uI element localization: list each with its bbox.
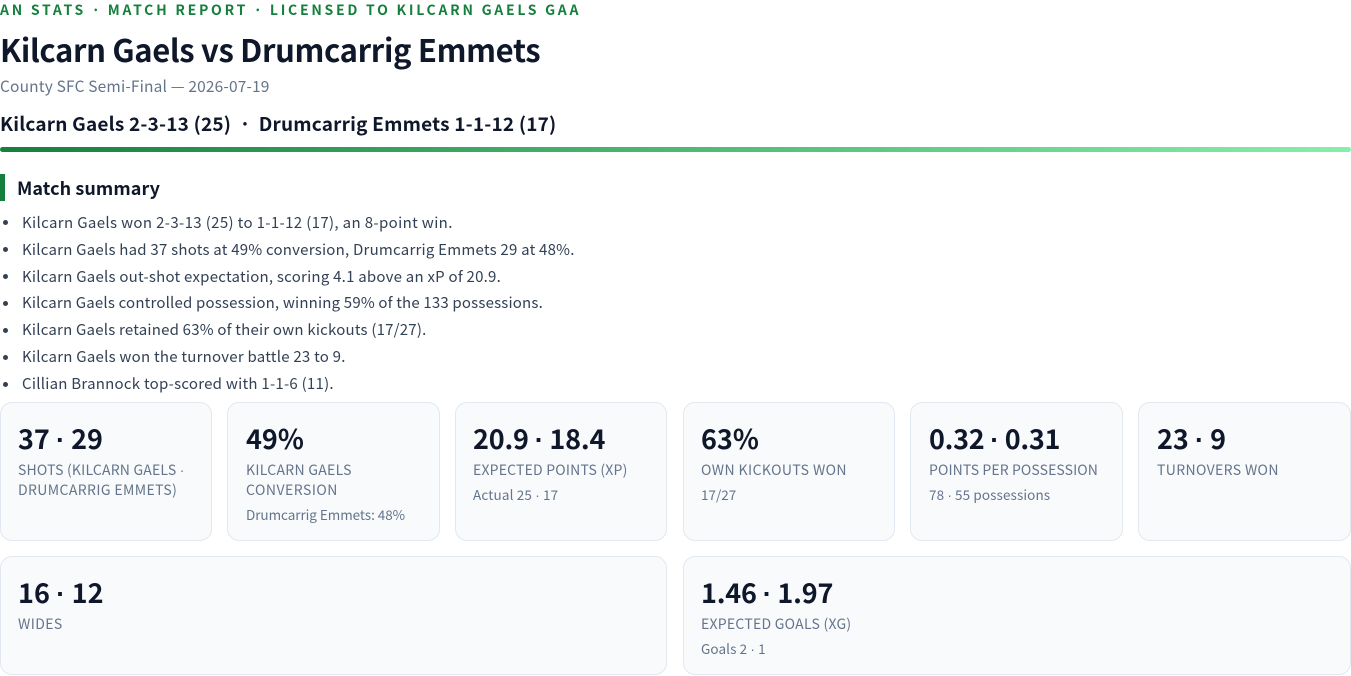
card: own kickouts [683, 402, 895, 541]
summary bullet list: Kilcarn Gaels won the turnover battle 23 to 9. [22, 346, 346, 367]
subtitle: County SFC Semi-Final — 2026-07-19 [0, 75, 270, 97]
card: points per possession: POINTS PER POSSESSION [929, 460, 1098, 480]
card: shots: DRUMCARRIG EMMETS) [18, 480, 177, 500]
card: expected goals [683, 556, 1351, 675]
title: Kilcarn Gaels vs Drumcarrig Emmets [0, 26, 540, 71]
scoreline: Kilcarn Gaels 2-3-13 (25) · Drumcarrig Emmets 1-1-12 (17) [0, 110, 556, 137]
card: shots: 37 · 29 [18, 418, 103, 457]
card: points per possession: 78 · 55 possessions [929, 484, 1050, 504]
card: wides: 16 · 12 [18, 572, 104, 611]
summary bullet list: Kilcarn Gaels controlled possession, winning 59% of the 133 possessions. [22, 292, 543, 313]
summary bullet list: Kilcarn Gaels won 2-3-13 (25) to 1-1-12 (17), an 8-point win. [22, 212, 453, 233]
card: shots: SHOTS (KILCARN GAELS · [18, 460, 185, 480]
card: turnovers [1138, 402, 1351, 541]
eyebrow: AN STATS · MATCH REPORT · LICENSED TO KILCARN GAELS GAA [0, 0, 581, 20]
card: conversion [227, 402, 440, 541]
heading: match summary: Match summary [17, 175, 160, 201]
summary bullet list: Cillian Brannock top-scored with 1-1-6 (11). [22, 373, 334, 394]
card: points per possession: 0.32 · 0.31 [929, 418, 1060, 457]
card: expected goals: Goals 2 · 1 [701, 638, 766, 658]
summary bullet list: Kilcarn Gaels retained 63% of their own kickouts (17/27). [22, 319, 427, 340]
card: expected points: EXPECTED POINTS (XP) [473, 460, 628, 480]
card: conversion: CONVERSION [246, 480, 338, 500]
card: conversion: Drumcarrig Emmets: 48% [246, 504, 405, 524]
card: expected points: Actual 25 · 17 [473, 484, 558, 504]
card: expected points [455, 402, 667, 541]
card: points per possession [910, 402, 1123, 541]
card: own kickouts: OWN KICKOUTS WON [701, 460, 847, 480]
card: shots [0, 402, 212, 541]
card: own kickouts: 63% [701, 418, 759, 457]
summary bullet list: Kilcarn Gaels out-shot expectation, scoring 4.1 above an xP of 20.9. [22, 266, 501, 287]
card: expected goals: EXPECTED GOALS (XG) [701, 614, 851, 634]
card: turnovers: TURNOVERS WON [1157, 460, 1279, 480]
card: own kickouts: 17/27 [701, 484, 736, 504]
card: wides: WIDES [18, 614, 63, 634]
card: expected goals: 1.46 · 1.97 [701, 572, 833, 611]
summary bullet list: Kilcarn Gaels had 37 shots at 49% conversion, Drumcarrig Emmets 29 at 48%. [22, 239, 575, 260]
card: conversion: KILCARN GAELS [246, 460, 352, 480]
card: conversion: 49% [246, 418, 304, 457]
gradient divider [0, 147, 1351, 152]
card: turnovers: 23 · 9 [1157, 418, 1226, 457]
card: expected points: 20.9 · 18.4 [473, 418, 605, 457]
card: wides [0, 556, 667, 675]
summary bullet list [3, 212, 575, 394]
